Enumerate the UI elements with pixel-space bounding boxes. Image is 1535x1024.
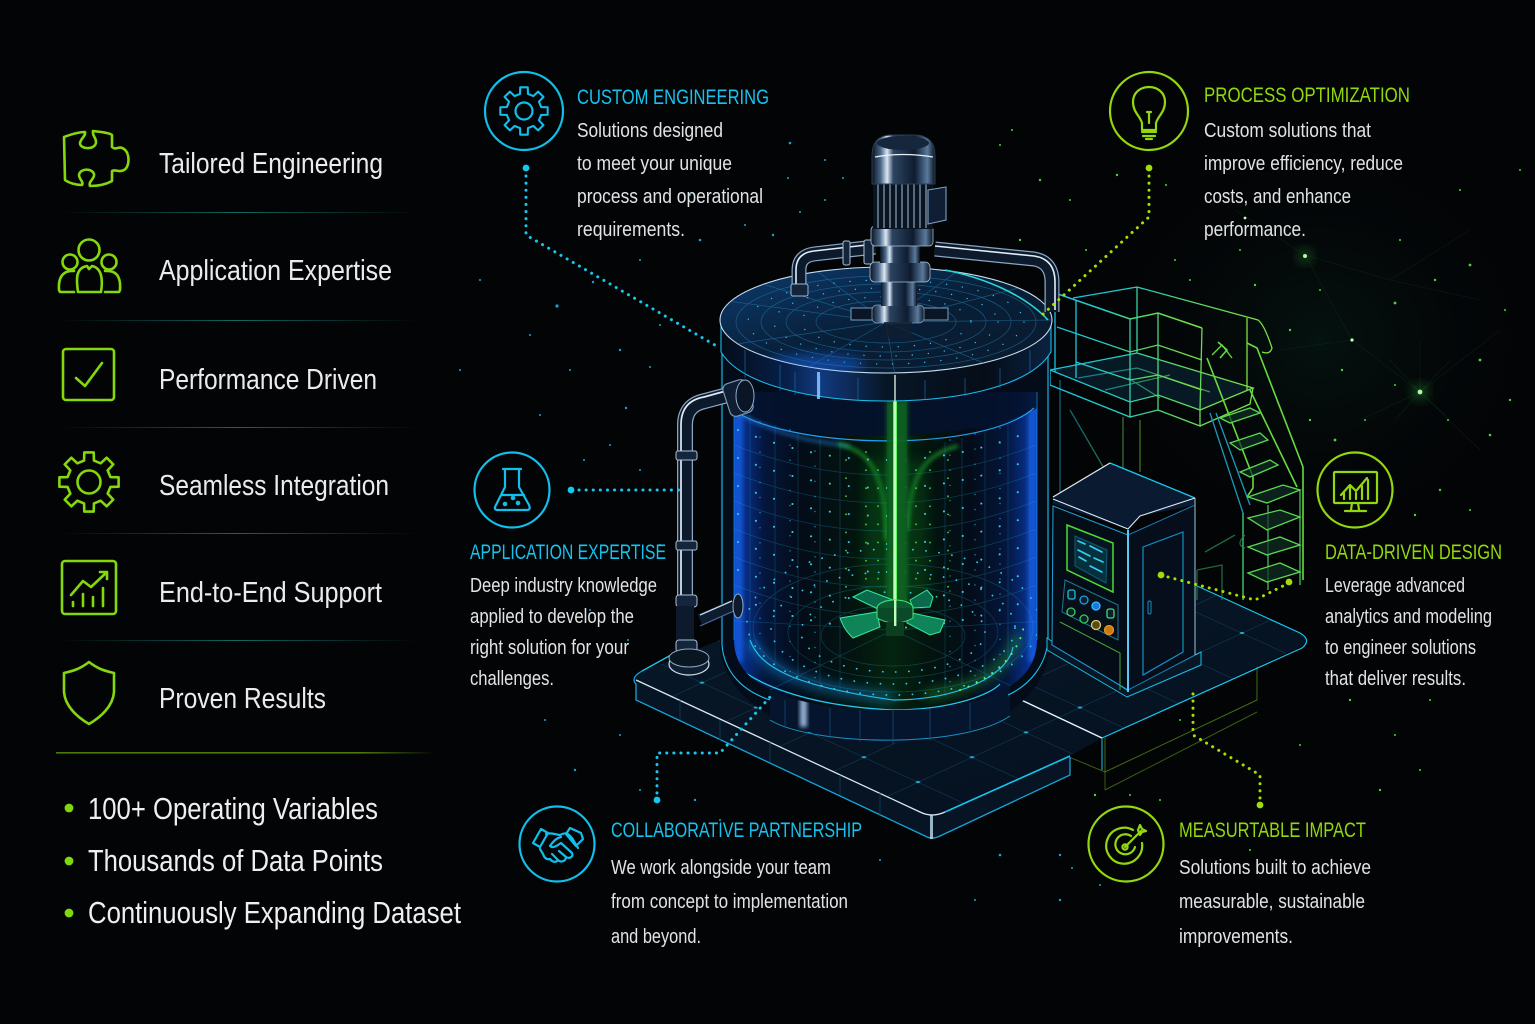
particle field	[459, 129, 1521, 901]
icon: flask	[474, 452, 550, 528]
callout: custom engineering	[485, 72, 769, 348]
floor rings	[747, 549, 1039, 695]
icon: checkbox	[63, 349, 114, 400]
text: custom engineering body: to meet your unique	[577, 152, 732, 175]
text: collaborative partnership body	[611, 856, 848, 948]
heading: collaborative partnership: COLLABORATIVE PARTNERSHIP	[611, 819, 862, 842]
motor and drive assembly	[791, 135, 1055, 338]
text: measurable impact body: Solutions built to achieve	[1179, 856, 1371, 879]
callout: application expertise	[470, 452, 684, 690]
icon: growth chart	[62, 561, 116, 614]
text: application expertise body: right solution for your	[470, 636, 629, 659]
text: custom engineering body	[577, 119, 763, 241]
icon: gear in circle	[485, 72, 563, 150]
impeller	[840, 590, 945, 638]
icon: target	[1088, 806, 1164, 882]
heading: process optimization: PROCESS OPTIMIZATION	[1204, 84, 1410, 107]
icon: team	[59, 240, 120, 292]
connector: application expertise	[568, 487, 684, 493]
text: process optimization body: improve efficiency, reduce	[1204, 152, 1403, 175]
control cabinet	[1047, 463, 1201, 697]
text: application expertise body: challenges.	[470, 667, 554, 690]
text: collaborative partnership body: We work alongside your team	[611, 856, 831, 879]
label: Proven Results: Proven Results	[159, 683, 326, 715]
vortex curves	[838, 444, 958, 540]
connector: custom engineering	[523, 165, 720, 348]
liquid surface	[734, 392, 1037, 436]
bottom glow rim	[750, 640, 893, 698]
shaft tube	[887, 401, 907, 611]
text: process optimization body: Custom solutions that	[1204, 119, 1371, 142]
motor cap	[872, 135, 935, 184]
tank body	[720, 345, 1060, 744]
text: data-driven design body: analytics and modeling	[1325, 605, 1492, 628]
illustration: mixing tank on platform	[634, 135, 1307, 839]
callout: measurable impact	[1088, 690, 1371, 948]
label: Tailored Engineering: Tailored Engineering	[159, 148, 383, 180]
tank lid	[720, 262, 1055, 401]
walkway and stairs	[1050, 287, 1303, 600]
dot rows	[738, 430, 1034, 628]
junction box	[928, 187, 946, 224]
side pipe	[669, 378, 755, 675]
text: data-driven design body: that deliver results.	[1325, 667, 1466, 690]
connector: process optimization	[1041, 165, 1152, 316]
label: Performance Driven: Performance Driven	[159, 364, 377, 396]
text: data-driven design body: Leverage advanced	[1325, 574, 1465, 597]
callout: collaborative partnership	[520, 697, 862, 948]
text: application expertise body: Deep industry knowledge	[470, 574, 657, 597]
label: Application Expertise: Application Expertise	[159, 255, 392, 287]
left column: feature list	[56, 131, 420, 724]
icon: puzzle piece	[64, 131, 128, 186]
liquid volume	[734, 392, 1037, 710]
text: measurable impact body: improvements.	[1179, 925, 1293, 948]
connector: measurable impact	[1193, 690, 1263, 808]
finned stator	[873, 183, 933, 229]
text: application expertise body: applied to develop the	[470, 605, 634, 628]
bullet: operating variables: 100+ Operating Variables	[88, 792, 378, 826]
label: End-to-End Support: End-to-End Support	[159, 577, 382, 609]
bullet stats	[65, 792, 461, 930]
icon: handshake	[520, 806, 594, 882]
heading: measurable impact: MEASURTABLE IMPACT	[1179, 819, 1366, 842]
icon: light bulb	[1110, 72, 1188, 150]
text: data-driven design body: to engineer solutions	[1325, 636, 1476, 659]
text: measurable impact body	[1179, 856, 1371, 948]
connector: collaborative partnership	[654, 697, 770, 803]
label: Seamless Integration: Seamless Integration	[159, 470, 389, 502]
text: process optimization body	[1204, 119, 1403, 241]
bullet: dataset: Continuously Expanding Dataset	[88, 896, 461, 930]
text: collaborative partnership body: and beyond.	[611, 925, 701, 948]
text: collaborative partnership body: from concept to implementation	[611, 890, 848, 913]
text: application expertise body	[470, 574, 657, 690]
icon: monitor chart	[1318, 452, 1392, 528]
text: custom engineering body: process and operational	[577, 185, 763, 208]
heading: application expertise: APPLICATION EXPERTISE	[470, 541, 666, 564]
icon: gear	[59, 452, 119, 512]
text: process optimization body: performance.	[1204, 218, 1306, 241]
icon: shield	[64, 662, 114, 724]
grid lines	[734, 415, 1036, 694]
text: measurable impact body: measurable, sustainable	[1179, 890, 1365, 913]
text: data-driven design body	[1325, 574, 1492, 690]
heading: custom engineering: CUSTOM ENGINEERING	[577, 86, 769, 109]
text: custom engineering body: Solutions designed	[577, 119, 723, 142]
mounting plate	[851, 308, 948, 320]
top pipes	[796, 244, 1055, 312]
text: process optimization body: costs, and enhance	[1204, 185, 1351, 208]
bullet: data points: Thousands of Data Points	[88, 844, 383, 878]
callout: process optimization	[1041, 72, 1410, 316]
callout: data-driven design	[1158, 452, 1502, 690]
text: custom engineering body: requirements.	[577, 218, 685, 241]
connector: data-driven design	[1158, 572, 1292, 600]
base platform	[634, 585, 1307, 839]
